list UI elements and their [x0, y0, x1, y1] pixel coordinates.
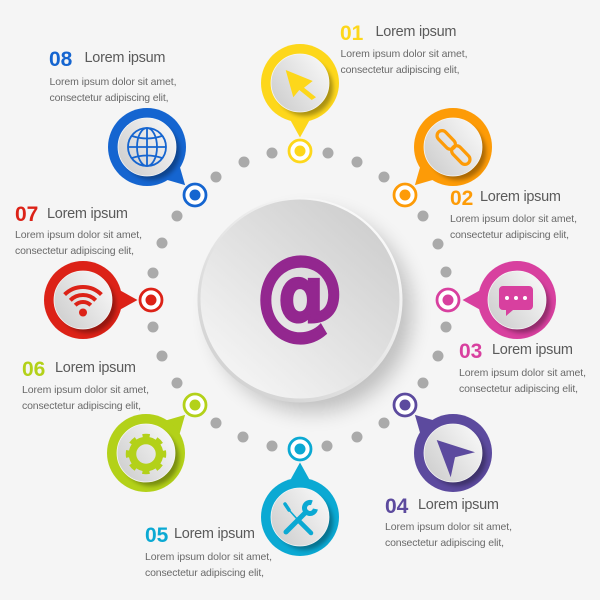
dotted ring: [148, 148, 452, 452]
text 02: Lorem ipsum: [480, 189, 561, 205]
text 07: 07: [15, 203, 38, 226]
step 03: [437, 261, 586, 395]
text 08: Lorem ipsum dolor sit amet,: [50, 76, 176, 88]
central disc with at sign: [198, 198, 412, 412]
text 01: Lorem ipsum dolor sit amet,: [340, 48, 468, 60]
text 05: Lorem ipsum: [174, 526, 255, 542]
text 03: [459, 340, 586, 395]
text 04: Lorem ipsum: [418, 497, 499, 513]
pin 04: [394, 394, 492, 492]
text 03: 03: [459, 340, 482, 363]
icon: chain link: [435, 129, 472, 166]
icon: globe: [128, 128, 166, 166]
step 02: [394, 108, 577, 241]
pin 05: [261, 438, 339, 556]
pin 02: [394, 108, 492, 206]
text 03: consectetur adipiscing elit,: [459, 383, 578, 395]
pin 06: [107, 394, 206, 492]
pin 03: [437, 261, 556, 339]
text 02: 02: [450, 187, 473, 210]
icon: navigation arrow: [437, 440, 475, 477]
text 05: [145, 524, 272, 579]
text 01: Lorem ipsum: [376, 24, 456, 40]
text 07: [15, 203, 142, 257]
text 06: 06: [22, 358, 45, 381]
icon: gear: [128, 436, 164, 472]
text 03: Lorem ipsum dolor sit amet,: [459, 367, 586, 379]
text 05: Lorem ipsum dolor sit amet,: [145, 551, 272, 563]
text 01: [340, 22, 468, 76]
pin 08: [108, 108, 206, 206]
text 08: 08: [49, 48, 73, 71]
text 04: consectetur adipiscing elit,: [385, 537, 504, 549]
step 06: [22, 358, 206, 492]
text 06: [22, 358, 149, 412]
text 06: Lorem ipsum dolor sit amet,: [22, 384, 149, 396]
text 02: [450, 187, 577, 241]
text 04: Lorem ipsum dolor sit amet,: [385, 521, 512, 533]
pin 01: [261, 44, 339, 162]
text 02: consectetur adipiscing elit,: [450, 229, 569, 241]
text 05: 05: [145, 524, 169, 547]
text 06: consectetur adipiscing elit,: [22, 400, 141, 412]
step 05: [145, 438, 339, 579]
text 08: consectetur adipiscing elit,: [50, 92, 168, 104]
pin 07: [44, 261, 162, 339]
icon: cursor: [286, 70, 316, 100]
text 07: Lorem ipsum dolor sit amet,: [15, 229, 142, 241]
text 04: 04: [385, 495, 409, 518]
text 08: Lorem ipsum: [84, 50, 166, 66]
text 06: Lorem ipsum: [55, 360, 136, 376]
text 04: [385, 495, 512, 549]
text 01: consectetur adipiscing elit,: [340, 64, 460, 76]
text 05: consectetur adipiscing elit,: [145, 567, 264, 579]
step 08: [49, 48, 206, 206]
icon: wrench and screwdriver: [285, 502, 315, 533]
step 01: [261, 22, 468, 162]
icon: wifi: [65, 287, 101, 316]
icon: chat bubble: [499, 286, 533, 316]
step 04: [385, 394, 512, 549]
central disc with at sign: @: [256, 235, 344, 350]
text 01: 01: [340, 22, 364, 45]
text 07: Lorem ipsum: [47, 206, 128, 222]
step 07: [15, 203, 162, 339]
text 08: [49, 48, 176, 104]
text 02: Lorem ipsum dolor sit amet,: [450, 213, 577, 225]
text 03: Lorem ipsum: [492, 342, 573, 358]
text 07: consectetur adipiscing elit,: [15, 245, 134, 257]
